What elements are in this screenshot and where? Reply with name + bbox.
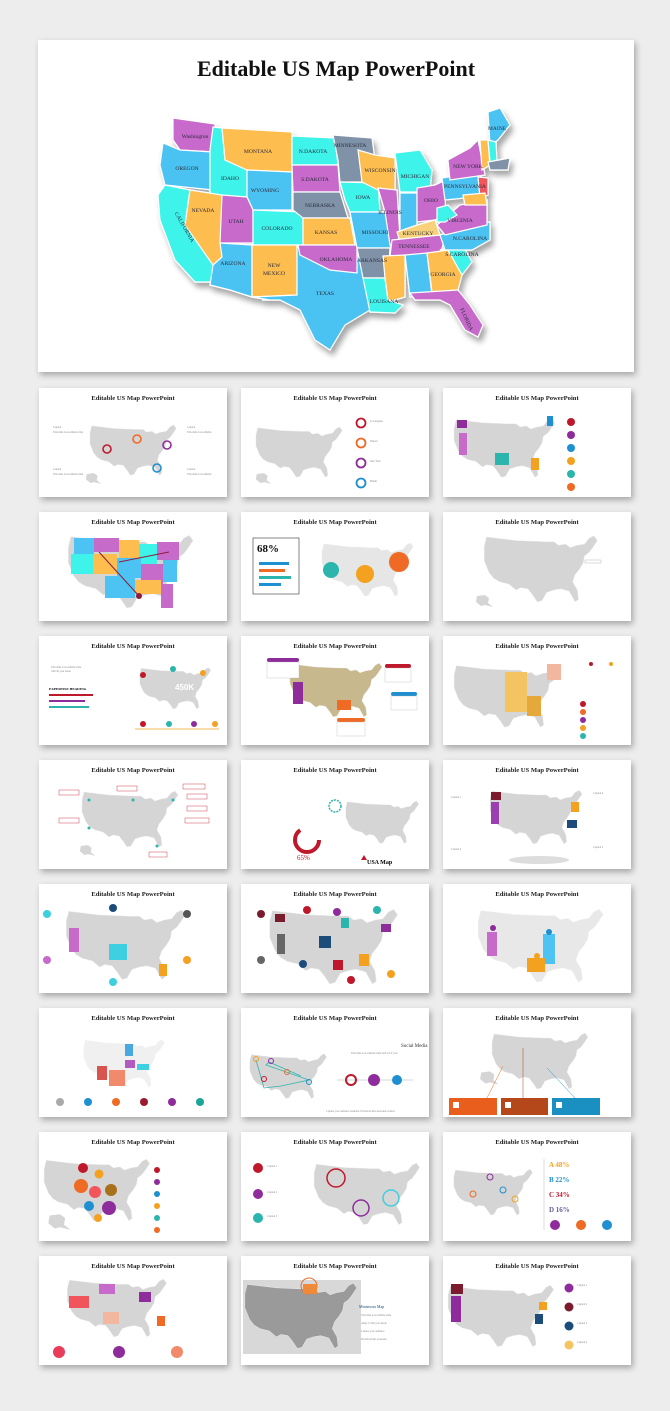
state labels: NEW YORK bbox=[453, 164, 483, 170]
thumb 23: dark gray map: Adapt it with your needs bbox=[361, 1322, 387, 1325]
state labels: COLORADO bbox=[261, 226, 293, 232]
thumb 8: tan map callouts: Editable US Map PowerPoint bbox=[293, 643, 377, 650]
state labels: KENTUCKY bbox=[403, 231, 433, 237]
thumb 2: pins list bbox=[241, 388, 429, 497]
thumb 24: numbered captions: Editable US Map PowerPoint bbox=[495, 1263, 579, 1270]
thumb 1: pins with captions: This slide is an editable bbox=[187, 431, 212, 434]
thumb 12: captions around map: Editable US Map PowerPoint bbox=[495, 767, 579, 774]
thumb 12: captions around map: Caption 4 bbox=[593, 792, 604, 795]
thumb 22: colored states 3 circles: Editable US Map PowerPoint bbox=[91, 1263, 175, 1270]
colored us map bbox=[157, 108, 516, 358]
thumb 5: 68%: Editable US Map PowerPoint bbox=[293, 519, 377, 526]
thumb 11: donut: Editable US Map PowerPoint bbox=[293, 767, 377, 774]
thumb 17: social media: This slide is an editable slide with all of your bbox=[351, 1052, 398, 1055]
thumb 8: tan map callouts bbox=[241, 636, 429, 745]
state labels: N.DAKOTA bbox=[299, 149, 327, 155]
thumb 1: pins with captions: This slide is an editable slide bbox=[53, 473, 84, 476]
thumb 20: rings bbox=[241, 1132, 429, 1241]
thumb 1: pins with captions: Editable US Map PowerPoint bbox=[91, 395, 175, 402]
thumb 13: cyan/purple circles: Editable US Map PowerPoint bbox=[91, 891, 175, 898]
state labels: LOUISANA bbox=[370, 299, 398, 305]
state labels: IOWA bbox=[356, 195, 370, 201]
thumb 18: three boxes: Editable US Map PowerPoint bbox=[495, 1015, 579, 1022]
thumb 18: three boxes bbox=[443, 1008, 631, 1117]
thumb 23: dark gray map: Minnesota Map bbox=[359, 1304, 384, 1309]
thumb 21: A B C D: Editable US Map PowerPoint bbox=[495, 1139, 579, 1146]
thumb 11: donut: 65% bbox=[297, 854, 310, 862]
thumb 15: light map pins: Editable US Map PowerPoint bbox=[495, 891, 579, 898]
thumb 1: pins with captions: Caption bbox=[187, 426, 196, 429]
state labels: WISCONSIN bbox=[364, 168, 396, 174]
thumb 7: 450K bbox=[39, 636, 227, 745]
state labels bbox=[173, 126, 507, 332]
thumb 17: social media: Editable US Map PowerPoint bbox=[293, 1015, 377, 1022]
thumb 4: colorful map: Editable US Map PowerPoint bbox=[91, 519, 175, 526]
thumb 23: dark gray map: Download this awesome bbox=[361, 1338, 387, 1341]
thumb 23: dark gray map: Capture your audience bbox=[361, 1330, 385, 1333]
state labels: N.CAROLINA bbox=[453, 236, 487, 242]
state labels: S.CAROLINA bbox=[445, 252, 479, 258]
thumb 7: 450K: This slide is an editable slide bbox=[51, 666, 82, 669]
thumb 3: colored states numbered bbox=[443, 388, 631, 497]
thumb 9: orange states list: Editable US Map PowerPoint bbox=[495, 643, 579, 650]
state labels: GEORGIA bbox=[430, 272, 456, 278]
thumb 24: numbered captions bbox=[443, 1256, 631, 1365]
thumb 17: social media: Capture your audience attention. Download this awesome creative bbox=[326, 1110, 396, 1113]
state labels: UTAH bbox=[228, 219, 244, 225]
thumb 2: pins list: Los Angeles bbox=[370, 420, 383, 423]
thumb 14: multi colored states: Editable US Map PowerPoint bbox=[293, 891, 377, 898]
thumb 23: dark gray map bbox=[241, 1256, 429, 1365]
state labels: VIRGINIA bbox=[447, 218, 473, 224]
thumb 2: pins list: Editable US Map PowerPoint bbox=[293, 395, 377, 402]
thumb 4: colorful map bbox=[39, 512, 227, 621]
thumb 10: city labels bbox=[39, 760, 227, 869]
state labels: OREGON bbox=[175, 166, 199, 172]
thumb 24: numbered captions: Caption 2 bbox=[577, 1303, 588, 1306]
state labels: CALIFORNIA bbox=[173, 211, 195, 244]
thumb 7: 450K: with all your needs bbox=[51, 670, 71, 673]
state labels: NEW bbox=[268, 263, 281, 269]
thumb 14: multi colored states bbox=[241, 884, 429, 993]
thumb 2: pins list: Miami bbox=[370, 480, 377, 483]
thumb 16: white map spheres bbox=[39, 1008, 227, 1117]
thumb 12: captions around map bbox=[443, 760, 631, 869]
thumb 5: 68%: 68% bbox=[257, 543, 279, 555]
thumb 24: numbered captions: Caption 4 bbox=[577, 1341, 588, 1344]
state labels: MONTANA bbox=[244, 149, 272, 155]
state labels: WYOMING bbox=[251, 188, 279, 194]
thumb 9: orange states list bbox=[443, 636, 631, 745]
thumb 1: pins with captions: Caption bbox=[53, 468, 62, 471]
state labels: MEXICO bbox=[263, 271, 285, 277]
thumb 21: A B C D: C 34% bbox=[549, 1191, 570, 1199]
thumb 17: social media bbox=[241, 1008, 429, 1117]
thumb 19: icon circles bbox=[39, 1132, 227, 1241]
thumb 1: pins with captions bbox=[39, 388, 227, 497]
thumb 7: 450K: 450K bbox=[175, 683, 194, 692]
thumb 5: 68% bbox=[241, 512, 429, 621]
thumb 6: gray map labels: Editable US Map PowerPoint bbox=[495, 519, 579, 526]
state labels: MISSOURI bbox=[362, 230, 389, 236]
thumb 16: white map spheres: Editable US Map PowerPoint bbox=[91, 1015, 175, 1022]
thumb 24: numbered captions: Caption 3 bbox=[577, 1322, 588, 1325]
state labels: MINNESOTA bbox=[334, 143, 366, 149]
state labels: OHIO bbox=[424, 198, 438, 204]
state labels: MAINE bbox=[488, 126, 507, 132]
thumb 17: social media: Social Media bbox=[401, 1044, 428, 1049]
thumb 11: donut bbox=[241, 760, 429, 869]
thumb 1: pins with captions: Caption bbox=[53, 426, 62, 429]
thumb 23: dark gray map: Editable US Map PowerPoint bbox=[293, 1263, 377, 1270]
state labels: S.DAKOTA bbox=[301, 177, 329, 183]
state labels: ARKANSAS bbox=[357, 258, 387, 264]
thumb 12: captions around map: Caption 2 bbox=[451, 848, 462, 851]
main slide bbox=[38, 40, 634, 372]
state labels: OKLAHOMA bbox=[320, 257, 352, 263]
state labels: NEBRASKA bbox=[305, 203, 335, 209]
state labels: PENNSYLVANIA bbox=[444, 184, 486, 190]
thumb 7: 450K: Editable US Map PowerPoint bbox=[91, 643, 175, 650]
thumb 21: A B C D: D 16% bbox=[549, 1206, 570, 1214]
thumb 21: A B C D bbox=[443, 1132, 631, 1241]
thumb 1: pins with captions: This slide is an editable bbox=[187, 473, 212, 476]
thumb 7: 450K: EXPERTISE HEADING bbox=[49, 687, 87, 691]
thumb 2: pins list: New York bbox=[370, 460, 381, 463]
thumb 13: cyan/purple circles bbox=[39, 884, 227, 993]
thumb 19: icon circles: Editable US Map PowerPoint bbox=[91, 1139, 175, 1146]
state labels: ARIZONA bbox=[220, 261, 246, 267]
state labels: TENNESSEE bbox=[398, 244, 430, 250]
thumb 3: colored states numbered: Editable US Map PowerPoint bbox=[495, 395, 579, 402]
thumb 23: dark gray map: This slide is an editable slide bbox=[361, 1314, 392, 1317]
state labels: FLORIDA bbox=[458, 307, 474, 332]
thumb 20: rings: Editable US Map PowerPoint bbox=[293, 1139, 377, 1146]
thumb 1: pins with captions: This slide is an editable slide bbox=[53, 431, 84, 434]
thumb 22: colored states 3 circles bbox=[39, 1256, 227, 1365]
thumb 6: gray map labels bbox=[443, 512, 631, 621]
state labels: KANSAS bbox=[315, 230, 337, 236]
state labels: MICHIGAN bbox=[401, 174, 429, 180]
thumb 1: pins with captions: Caption bbox=[187, 468, 196, 471]
state labels: IDAHO bbox=[221, 176, 239, 182]
thumb 12: captions around map: Caption 3 bbox=[593, 846, 604, 849]
thumb 21: A B C D: A 48% bbox=[549, 1161, 569, 1169]
thumb 2: pins list: Denver bbox=[370, 440, 378, 443]
thumb 20: rings: Caption 2 bbox=[267, 1191, 278, 1194]
state labels: NEVADA bbox=[192, 208, 214, 214]
thumb 11: donut: USA Map bbox=[367, 860, 393, 866]
thumb 24: numbered captions: Caption 1 bbox=[577, 1284, 588, 1287]
thumb 10: city labels: Editable US Map PowerPoint bbox=[91, 767, 175, 774]
thumb 12: captions around map: Caption 1 bbox=[451, 796, 462, 799]
thumb 20: rings: Caption 1 bbox=[267, 1165, 278, 1168]
title: Editable US Map PowerPoint bbox=[197, 56, 475, 81]
state labels: Washington bbox=[182, 134, 208, 140]
state labels: TEXAS bbox=[316, 291, 334, 297]
state labels: ILLINOIS bbox=[378, 210, 402, 216]
thumb 15: light map pins bbox=[443, 884, 631, 993]
thumb 21: A B C D: B 22% bbox=[549, 1176, 569, 1184]
thumb 20: rings: Caption 3 bbox=[267, 1215, 278, 1218]
